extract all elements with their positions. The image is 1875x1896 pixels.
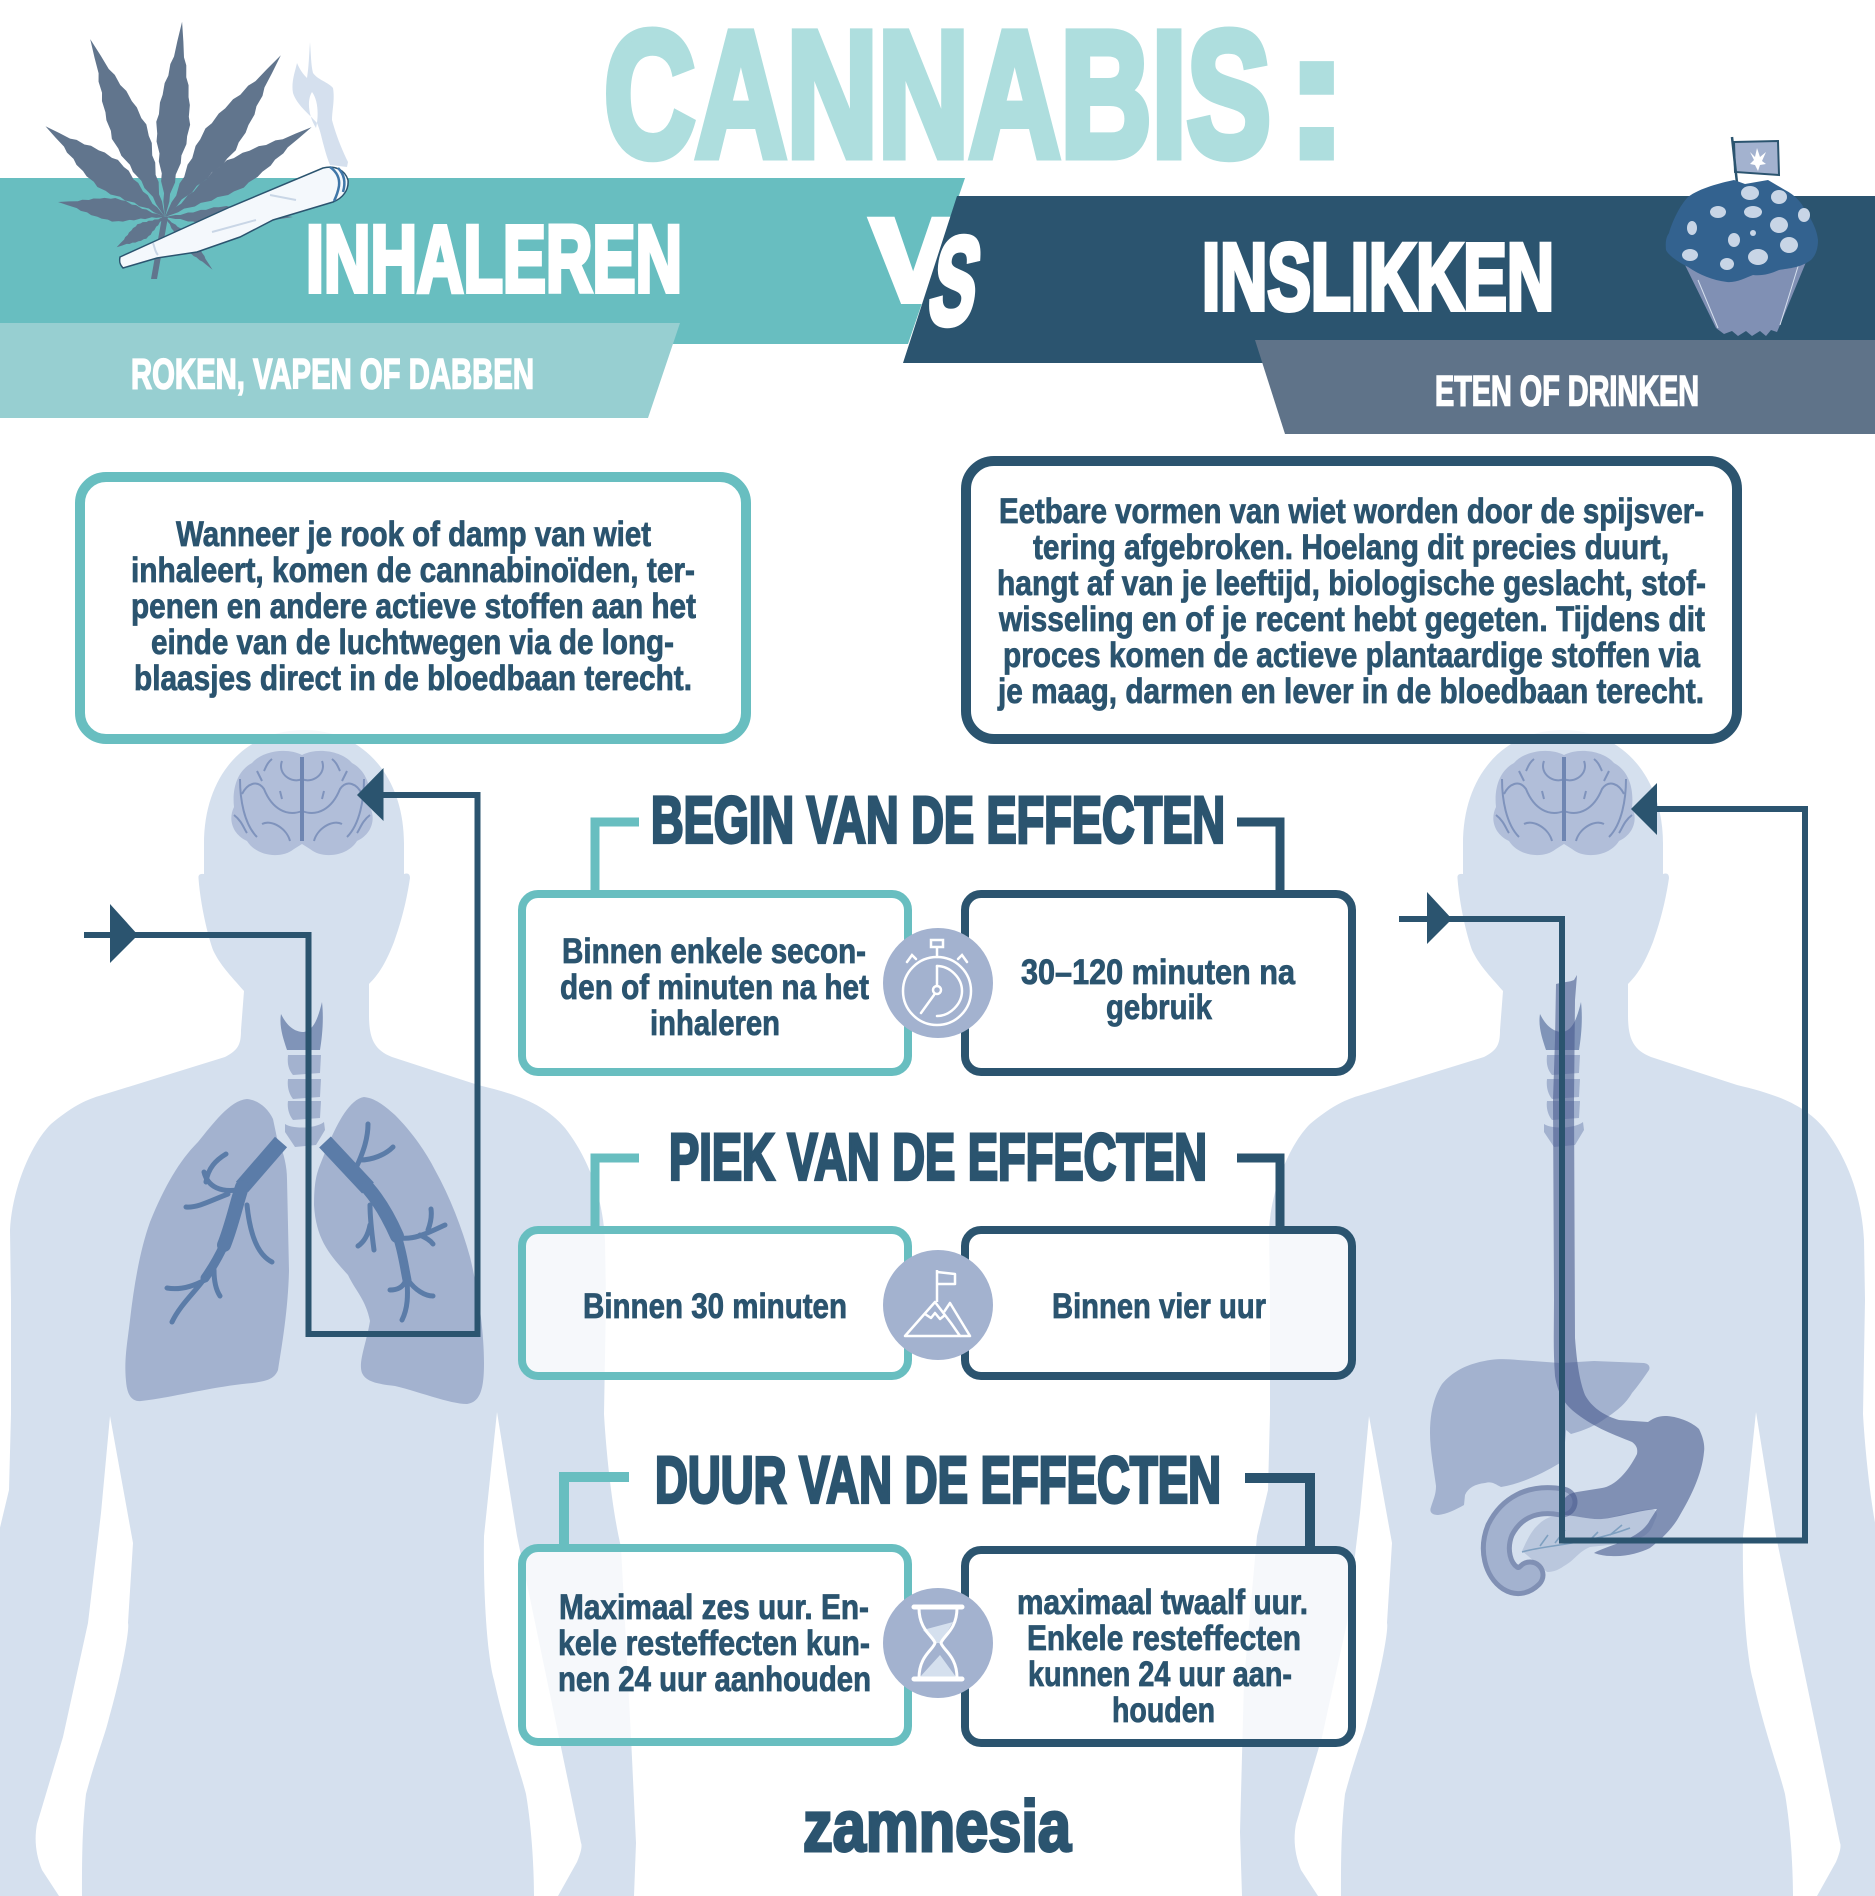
VS letter S: S	[920, 211, 991, 351]
text block: penen en andere actieve stoffen aan het	[131, 587, 696, 626]
navy bracket	[1237, 1158, 1280, 1227]
icon: stopwatch	[883, 928, 993, 1038]
text block	[131, 515, 696, 698]
muffin top	[1666, 180, 1818, 282]
box right: 30–120 minuten na	[1021, 953, 1295, 992]
heading inslikken: INSLIKKEN	[1202, 224, 1554, 330]
text block: einde van de luchtwegen via de long-	[151, 623, 674, 662]
icon: mountain with flag	[883, 1250, 993, 1360]
left brain	[231, 751, 373, 855]
right bronchi	[325, 1124, 445, 1320]
cupcake wrapper	[1685, 250, 1811, 336]
pancreas	[1522, 1509, 1657, 1572]
teal bracket	[595, 822, 639, 891]
left organs: lungs, trachea and brain	[125, 751, 484, 1404]
box left	[522, 894, 908, 1072]
subtitle eten: ETEN OF DRINKEN	[1435, 368, 1699, 416]
muffin dots	[1682, 186, 1810, 270]
text block: blaasjes direct in de bloedbaan terecht.	[134, 659, 692, 698]
box left	[522, 1230, 908, 1376]
right trachea	[1539, 1002, 1584, 1147]
box right: maximaal twaalf uur.	[1017, 1583, 1308, 1622]
text block	[997, 492, 1706, 711]
section: duur van de effecten	[522, 1442, 1352, 1743]
right brain	[1493, 751, 1635, 855]
section: piek van de effecten	[522, 1120, 1352, 1376]
left trachea	[280, 1002, 325, 1147]
right arrow path through the digestive tract to the brain	[1399, 783, 1805, 1540]
heading: PIEK VAN DE EFFECTEN	[669, 1120, 1207, 1194]
text block: proces komen de actieve plantaardige stoffen via	[1003, 636, 1700, 675]
text block: Eetbare vormen van wiet worden door de spijsver-	[999, 492, 1704, 531]
box left: nen 24 uur aanhouden	[558, 1660, 871, 1699]
text block: je maag, darmen en lever in de bloedbaan terecht.	[997, 672, 1704, 711]
text block: Wanneer je rook of damp van wiet	[176, 515, 651, 554]
box right: kunnen 24 uur aan-	[1028, 1655, 1292, 1694]
box left: den of minuten na het	[560, 968, 869, 1007]
teal bracket	[564, 1477, 629, 1546]
heading: BEGIN VAN DE EFFECTEN	[651, 782, 1225, 856]
box right	[965, 894, 1352, 1072]
right organs: brain, trachea, liver, stomach and pancreas	[1430, 751, 1704, 1581]
box right	[965, 1550, 1352, 1743]
icon: smoke	[292, 42, 348, 167]
heading: DUUR VAN DE EFFECTEN	[655, 1442, 1221, 1516]
icon: joint	[120, 167, 348, 268]
box left: kele resteffecten kun-	[558, 1624, 870, 1663]
VS letter V: V	[872, 197, 954, 325]
left lung	[125, 1099, 289, 1401]
heading inhaleren: INHALEREN	[306, 206, 682, 312]
icon: hourglass	[883, 1588, 993, 1698]
oesophagus and stomach	[1553, 975, 1704, 1556]
logo: zamnesia: zamnesia	[803, 1787, 1072, 1867]
box right: houden	[1112, 1691, 1215, 1730]
navy bracket	[1245, 1478, 1310, 1548]
box right	[965, 1230, 1352, 1376]
subtitle roken: ROKEN, VAPEN OF DABBEN	[131, 350, 534, 398]
text block: tering afgebroken. Hoelang dit precies duurt,	[1033, 528, 1669, 567]
section: begin van de effecten	[522, 782, 1352, 1072]
right body silhouette	[1240, 730, 1875, 1896]
box left: Binnen enkele secon-	[562, 932, 866, 971]
teal bracket	[595, 1158, 639, 1227]
duodenum	[1496, 1501, 1562, 1581]
subtitle band left	[0, 323, 680, 418]
box left: Binnen 30 minuten	[583, 1287, 847, 1326]
box left	[522, 1548, 908, 1742]
banner: inslikken	[903, 196, 1875, 434]
banner: inhaleren	[0, 178, 965, 418]
text block: wisseling en of je recent hebt gegeten. Tijdens dit	[998, 600, 1705, 639]
right lung	[314, 1097, 484, 1404]
icon: space muffin with flag	[1666, 137, 1818, 336]
flag	[1734, 141, 1779, 175]
text block: inhaleert, komen de cannabinoïden, ter-	[131, 551, 695, 590]
box left: inhaleren	[650, 1004, 780, 1043]
text block: hangt af van je leeftijd, biologische geslacht, stof-	[997, 564, 1706, 603]
box right: gebruik	[1106, 988, 1212, 1027]
box right: Binnen vier uur	[1052, 1287, 1266, 1326]
panel: inslikken intro text	[966, 461, 1737, 739]
box left: Maximaal zes uur. En-	[559, 1588, 869, 1627]
left arrow path through the lungs to the brain	[84, 768, 478, 1334]
panel: inhaleren intro text	[80, 477, 746, 739]
subtitle band right	[1255, 340, 1875, 434]
navy bracket	[1237, 822, 1280, 891]
box right: Enkele resteffecten	[1027, 1619, 1301, 1658]
left bronchi	[167, 1142, 281, 1322]
liver	[1430, 1359, 1649, 1515]
icon: cannabis leaf	[35, 20, 320, 279]
left body silhouette	[0, 730, 636, 1896]
pancreas veins	[1522, 1525, 1630, 1552]
